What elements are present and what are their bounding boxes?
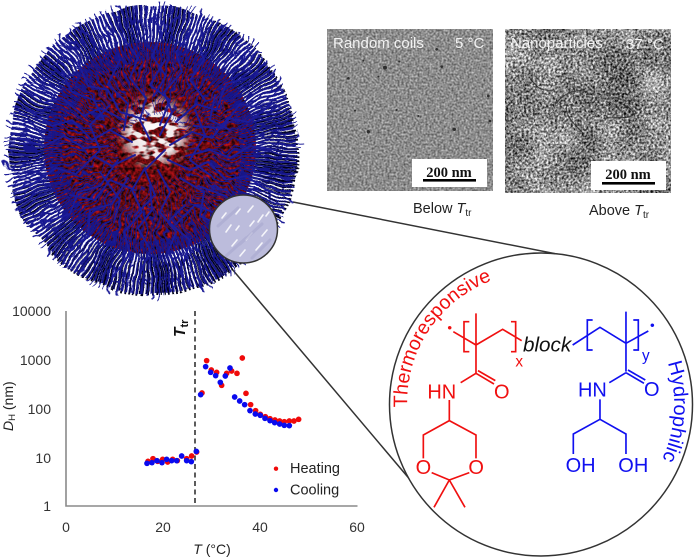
hydrophilic atom labels [566,317,660,477]
x axis tick labels: 60 [349,519,365,535]
y axis tick labels: 100 [28,401,51,417]
x axis tick labels: 20 [155,519,171,535]
hydrophilic atom labels: • [650,317,655,332]
y axis title: H [7,414,18,421]
caption: below transition temperature: Below T [413,201,465,217]
scale bar box [591,161,666,190]
caption: below transition temperature: tr [465,208,472,219]
cooling data points [144,364,292,466]
y axis tick labels: 10 [35,450,51,466]
x axis tick labels: 0 [62,519,70,535]
transition temperature label: T [172,326,189,337]
hydrophilic atom labels: HN [578,380,607,402]
scatter chart: hydrodynamic diameter vs temperature [0,303,365,557]
label: 37 °C: 37 °C [626,36,664,53]
TEM image: nanoparticles [505,29,671,193]
thermoresponsive atom labels [416,320,523,479]
thermoresponsive block [423,313,522,507]
thermoresponsive atom labels: x [515,354,523,371]
zoom line: upper connector [293,202,572,257]
thermoresponsive atom labels: • [447,320,452,335]
hydrophilic atom labels: O [644,379,660,401]
dark aggregates [530,77,635,133]
red thermoresponsive core [44,42,256,254]
hydrophilic atom labels: OH [618,455,648,477]
transition temperature label: tr [179,319,191,328]
scale bar box: 200 nm [605,167,651,183]
inner blue chains [78,76,226,224]
x axis title: T (°C) [193,541,231,557]
label: random coils: Random coils [333,35,424,52]
y axis tick labels: 10000 [12,303,51,319]
caption: above transition temperature: Above T [589,203,643,219]
x axis tick labels: 40 [252,519,268,535]
axes [66,311,358,506]
x axis tick labels [62,519,365,535]
scale bar box: 200 nm [426,165,472,181]
transition temperature line [194,311,196,503]
thermoresponsive atom labels: O [416,457,431,479]
label: nanoparticles: Nanoparticles [511,35,603,52]
central white gaps [115,92,195,172]
hydrophilic atom labels: y [642,348,650,365]
legend: Heating [290,461,340,477]
TEM image: random coils [327,29,493,191]
y axis tick labels: 1000 [20,352,51,368]
hydrophilic block [573,312,648,454]
zoom line: lower connector [232,269,434,508]
nanoparticle illustration [16,14,288,286]
y axis title: D [0,421,16,431]
polymer chemical structure [393,272,688,508]
dark shadowed bristles [41,39,265,263]
legend: Cooling [290,482,339,498]
scale bar box [412,159,487,187]
thermoresponsive atom labels: HN [427,381,456,403]
y axis title: (nm) [0,381,16,414]
magnified region lens [210,195,278,263]
lens bristle texture [218,206,270,258]
curved label: hydrophilic: Hydrophilic [663,360,688,462]
blue chains crossing the core [18,14,276,278]
label: 5 °C: 5 °C [455,35,485,52]
blue hydrophilic corona [35,33,269,267]
mid blue chains [56,54,248,246]
caption: above transition temperature: tr [643,210,650,221]
thermoresponsive atom labels: O [494,381,510,403]
heating data points [145,355,301,465]
thermoresponsive atom labels: O [468,457,484,479]
curved label: thermoresponsive: Thermoresponsive [393,272,490,407]
hydrophilic atom labels: OH [566,455,596,477]
dark specks [347,48,491,133]
jagged outer tips [16,14,288,286]
block label: block [523,334,573,357]
lower shaded rim [24,22,280,278]
magnified polymer structure circle [390,253,692,556]
y axis tick labels [12,303,51,514]
legend [274,461,340,498]
y axis tick labels: 1 [43,498,51,514]
